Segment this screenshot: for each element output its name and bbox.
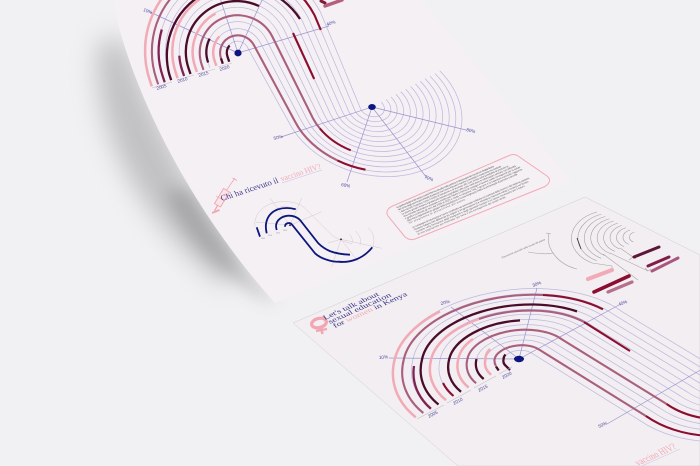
legend bars <box>588 247 678 292</box>
percentage rays and labels: 50% <box>597 421 608 429</box>
percentage rays and labels <box>143 0 476 189</box>
percentage rays and labels: 40% <box>618 299 628 307</box>
year axis: 2005 <box>156 83 167 91</box>
legend bars top <box>321 0 342 6</box>
chart: grey fan arcs <box>571 212 634 263</box>
title: sexual education: sexual education <box>326 291 393 325</box>
percentage rays and labels: 50% <box>273 134 283 141</box>
body copy: La sperimentazione del vaccino contro l'HIV ha coinvolto molte persone in diversi paesi del mondo con risultati diversi <box>395 165 495 209</box>
title: vaccine question: vaccino HIV? <box>279 162 323 183</box>
percentage rays and labels: 10% <box>143 7 153 15</box>
icon: syringe <box>212 178 237 213</box>
panel: upper curled sheet <box>113 0 572 303</box>
year axis: 2010 <box>452 396 464 406</box>
text box <box>387 154 550 240</box>
year axis: 2020 <box>219 64 230 72</box>
title: vaccine question <box>219 162 323 203</box>
percentage rays and labels: 70% <box>424 174 434 182</box>
body copy: Le campagne di informazione hanno contribuito ad aumentare la fiducia nei confronti della ricerca e del sistema sanitario <box>412 177 531 229</box>
body copy: nel programma di prevenzione del paese. <box>408 198 467 225</box>
chart: upper S-curve rings <box>143 0 476 189</box>
title: vaccine question: Chi ha ricevuto il <box>219 176 280 203</box>
percentage rays and labels: 10% <box>379 354 388 360</box>
tiny year labels: 2010 <box>268 235 272 237</box>
year axis <box>152 63 232 91</box>
percentage rays and labels: 40% <box>326 19 336 27</box>
track rings <box>145 0 462 177</box>
icon: female symbol <box>311 317 327 334</box>
title: sexual education: for women in Kenya <box>331 290 409 329</box>
percentage rays and labels: 20% <box>440 299 450 306</box>
percentage rays and labels: 80% <box>466 127 476 134</box>
percentage rays and labels <box>379 280 700 429</box>
body copy: di una popolazione più informata, più sana e più consapevole dei propri diritti. <box>417 196 507 236</box>
body copy: I dati raccolti mostrano come il livello di istruzione e di accesso alle cure incida sulla possibilità di protezione <box>399 165 510 214</box>
callout lines and note: Educazione sessuale nelle scuole del paese <box>501 238 546 259</box>
body copy: Ogni linea rappresenta un gruppo della popolazione e la sua lunghezza indica la percentuale di persone coinvolte <box>406 173 519 222</box>
track rings <box>393 289 700 442</box>
body copy: Il grafico confronta gli anni dal 2005 al 2020 e mette in relazione l'età, il genere e la copertura vaccinale raggiunta <box>404 168 524 220</box>
percentage rays and labels: 60% <box>341 182 351 189</box>
tiny year labels: 2020 <box>283 230 287 232</box>
centre dot <box>514 356 524 362</box>
navy data tracks <box>257 208 372 262</box>
body copy: Una corretta educazione sessuale a scuola può ridurre il rischio di contagio e favorire scelte consapevoli per la salute <box>403 166 522 218</box>
panel: lower flat sheet <box>293 197 700 466</box>
year axis <box>417 367 513 419</box>
tiny year labels: 2005 <box>261 238 265 240</box>
body copy: Investire nella formazione degli insegnanti e degli operatori sanitari è un passo necessario per il futuro <box>415 185 526 233</box>
grey guide rings <box>255 198 382 267</box>
callout lines and note <box>501 233 577 269</box>
body copy: Le donne giovani restano il gruppo più esposto soprattutto nelle zone rurali dove le informazioni arrivano con difficoltà <box>401 165 517 216</box>
chart: lower S-curve rings <box>379 280 700 442</box>
paper shadow: broad <box>98 40 240 285</box>
repeated title at bottom <box>632 442 680 466</box>
connector brackets <box>592 248 651 280</box>
coloured data tracks <box>393 295 700 436</box>
percentage rays and labels: 30% <box>532 280 542 288</box>
year axis: 2020 <box>501 370 513 380</box>
year axis: 2015 <box>477 383 489 393</box>
body copy: Nel corso degli anni la percentuale di persone che hanno ricevuto il vaccino è cresciuta in modo lento ma costante <box>397 165 503 211</box>
tiny year labels <box>261 230 287 240</box>
navy centre dots <box>289 224 342 240</box>
year axis: 2010 <box>177 76 188 84</box>
coloured data tracks <box>145 0 366 170</box>
year axis: 2015 <box>198 70 209 78</box>
paper shadow: close to sheet <box>165 190 277 305</box>
tiny year labels: 2015 <box>276 232 280 234</box>
centre dot 2 <box>368 104 376 110</box>
chart: small navy S-curve <box>255 198 382 267</box>
year axis: 2005 <box>427 409 439 419</box>
body copy: Restano tuttavia forti differenze tra regioni e tra generazioni che richiedono interventi mirati e continui nel tempo <box>413 180 530 231</box>
centre dot <box>234 50 242 56</box>
title: sexual education: Let's talk about <box>321 290 382 321</box>
body copy <box>395 157 536 236</box>
